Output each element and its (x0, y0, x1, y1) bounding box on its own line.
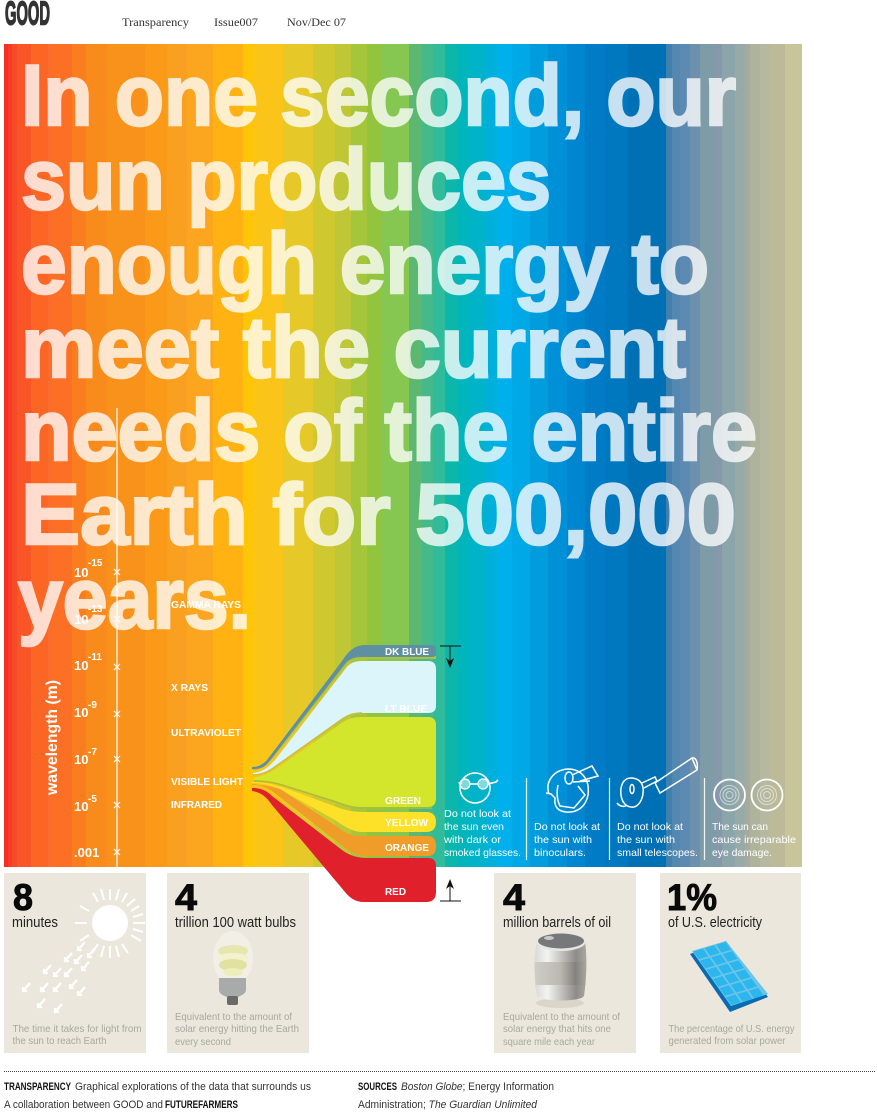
band: yellow (252, 782, 436, 832)
icon: solar panel (690, 941, 768, 1012)
icon: falling light arrows (23, 942, 94, 1012)
safety warning: telescopes: the sun with (617, 834, 675, 846)
radiation type labels: ULTRAVIOLET (171, 727, 242, 739)
axis tick labels: -15 (88, 558, 103, 569)
safety warning: telescopes (617, 758, 698, 859)
panel: 4 million barrels: million barrels of oil (503, 915, 611, 931)
panel: 4 trillion bulbs: solar energy hitting the Earth (175, 1023, 299, 1035)
icon: face with dark glasses (459, 773, 498, 803)
header: issue information (122, 17, 346, 29)
safety warning: glasses: the sun even (444, 821, 504, 833)
title headline: Earth for 500,000 (21, 467, 736, 563)
safety warning: glasses: with dark or (443, 834, 502, 846)
title headline: sun produces (21, 132, 551, 228)
radiation type labels: INFRARED (171, 799, 222, 811)
safety warning: glasses: smoked glasses. (444, 847, 521, 859)
icon: face with telescope (617, 758, 697, 807)
panel: 8 minutes: The time it takes for light from (12, 1023, 142, 1035)
footer: credits: A collaboration between GOOD and (4, 1099, 163, 1111)
header: issue information: Nov/Dec 07 (287, 17, 346, 29)
footer: sources: SOURCES (358, 1081, 397, 1093)
title headline: needs of the entire (21, 383, 757, 479)
axis tick labels (74, 558, 103, 860)
footer: credits (4, 1081, 311, 1111)
safety warning: eye damage: The sun can (712, 821, 768, 833)
divider lines (526, 778, 704, 860)
panel: 8 minutes (4, 873, 146, 1053)
panel: 4 million barrels: square mile each year (503, 1036, 595, 1048)
axis tick labels: 10 (74, 705, 88, 720)
band: red (252, 788, 436, 902)
band: light blue (253, 661, 436, 775)
header: issue information: Issue007 (214, 17, 258, 29)
panel: 4 trillion bulbs: every second (175, 1036, 231, 1048)
axis tick labels: 10 (74, 612, 88, 627)
safety warning: binoculars: Do not look at (534, 821, 600, 833)
panel: 8 minutes: minutes (12, 915, 58, 931)
panel: rainbow spectrum background (4, 44, 802, 867)
axis tick labels: -5 (88, 794, 97, 805)
footer: sources: Boston Globe; Energy Information (401, 1081, 554, 1093)
radiation type labels: X RAYS (171, 682, 208, 694)
axis tick labels: 10 (74, 799, 88, 814)
footer: sources (358, 1081, 554, 1111)
safety warning: eye damage: eye damage. (712, 847, 772, 859)
title headline: meet the current (21, 300, 686, 396)
axis tick labels: -11 (88, 652, 102, 663)
footer: credits: FUTUREFARMERS (165, 1099, 238, 1111)
panel: 4 trillion bulbs: 4 (175, 877, 197, 918)
panel: 1% of U.S. electricity: The percentage of U.S. energy (668, 1023, 795, 1035)
arrow: top limit of visible light (440, 646, 461, 668)
safety warning: eye damage: cause irreparable (712, 834, 796, 846)
panel: 8 minutes: the sun to reach Earth (12, 1035, 107, 1047)
radiation type labels: VISIBLE LIGHT (171, 776, 244, 788)
panel: 4 trillion bulbs: Equivalent to the amount of (175, 1011, 292, 1023)
safety warning: eye damage (712, 780, 796, 859)
band: green (254, 717, 436, 808)
band: orange (252, 784, 436, 856)
safety warning: glasses (443, 773, 521, 859)
band: green: GREEN (385, 795, 421, 807)
icon: damaged eyes (714, 780, 782, 810)
wavelength axis with ticks (114, 408, 120, 867)
axis tick labels: -7 (88, 747, 97, 758)
title headline (18, 48, 757, 647)
icon: oil barrel (534, 933, 586, 1008)
axis tick labels: 10 (74, 658, 88, 673)
header: issue information: Transparency (122, 17, 189, 29)
panel: 4 million barrels: 4 (503, 877, 525, 918)
title headline: years. (18, 551, 251, 647)
safety warning: binoculars: binoculars. (534, 847, 586, 859)
band: red: RED (385, 886, 406, 898)
safety warning: binoculars (534, 766, 600, 859)
icon: sun with light rays (75, 889, 145, 958)
panel: 1% of U.S. electricity (660, 873, 801, 1053)
panel: 4 million barrels: solar energy that hits one (503, 1023, 611, 1035)
safety warning: telescopes: small telescopes. (617, 847, 698, 859)
axis title: wavelength: wavelength (m) (44, 680, 61, 796)
title headline: In one second, our (21, 48, 736, 144)
axis tick labels: -13 (88, 604, 103, 615)
band: dark blue: DK BLUE (385, 646, 429, 658)
axis tick labels: 10 (74, 752, 88, 767)
safety warning: glasses: Do not look at (444, 808, 511, 820)
arrow: bottom limit of visible light (440, 879, 461, 901)
title headline: enough energy to (21, 216, 709, 312)
footer: credits: TRANSPARENCY (4, 1081, 71, 1093)
panel: 1% of U.S. electricity: 1% (667, 877, 717, 918)
panel: 1% of U.S. electricity: of U.S. electricity (668, 915, 763, 931)
icon: face with binoculars (546, 766, 598, 812)
safety warning: binoculars: the sun with (534, 834, 592, 846)
band: light blue: LT BLUE (385, 703, 427, 715)
panel: 4 million barrels (494, 873, 636, 1053)
safety warning: telescopes: Do not look at (617, 821, 683, 833)
panel: 4 trillion bulbs: trillion 100 watt bulbs (175, 915, 296, 931)
panel: 8 minutes: 8 (13, 877, 33, 918)
axis tick labels: -9 (88, 700, 97, 711)
panel: 1% of U.S. electricity: generated from solar power (668, 1035, 786, 1047)
band: dark blue (252, 645, 436, 770)
band: yellow: YELLOW (385, 817, 428, 829)
radiation type labels (171, 599, 244, 811)
panel: 4 trillion bulbs (167, 873, 309, 1053)
visible light spectrum flow chart (252, 645, 436, 902)
panel: 4 million barrels: Equivalent to the amount of (503, 1011, 620, 1023)
axis tick labels: 10 (74, 565, 88, 580)
icon: compact fluorescent bulb (213, 931, 253, 1005)
radiation type labels: GAMMA RAYS (171, 599, 241, 611)
axis tick labels: .001 (74, 845, 99, 860)
footer: credits: Graphical explorations of the data that surrounds us (75, 1081, 311, 1093)
band: orange: ORANGE (385, 842, 429, 854)
footer: sources: Administration; The Guardian Unlimited (358, 1099, 538, 1111)
